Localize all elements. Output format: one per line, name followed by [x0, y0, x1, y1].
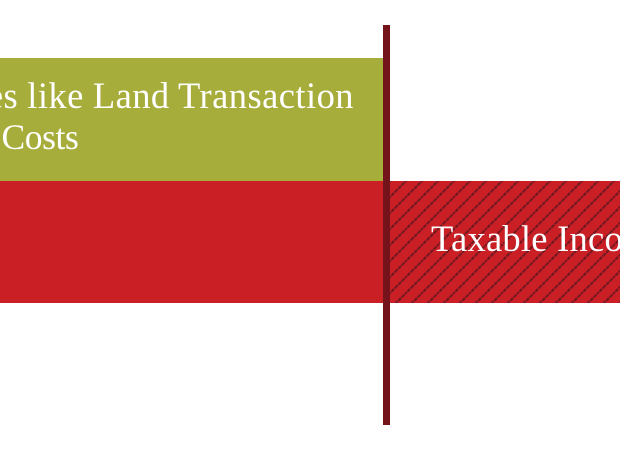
text: fees label line two: Costs: [2, 117, 78, 157]
panel: hatched taxable income bar: [390, 181, 620, 303]
panel: red bar left: [0, 181, 383, 303]
panel: olive costs bar: [0, 58, 383, 181]
divider: vertical axis line: [383, 25, 390, 425]
